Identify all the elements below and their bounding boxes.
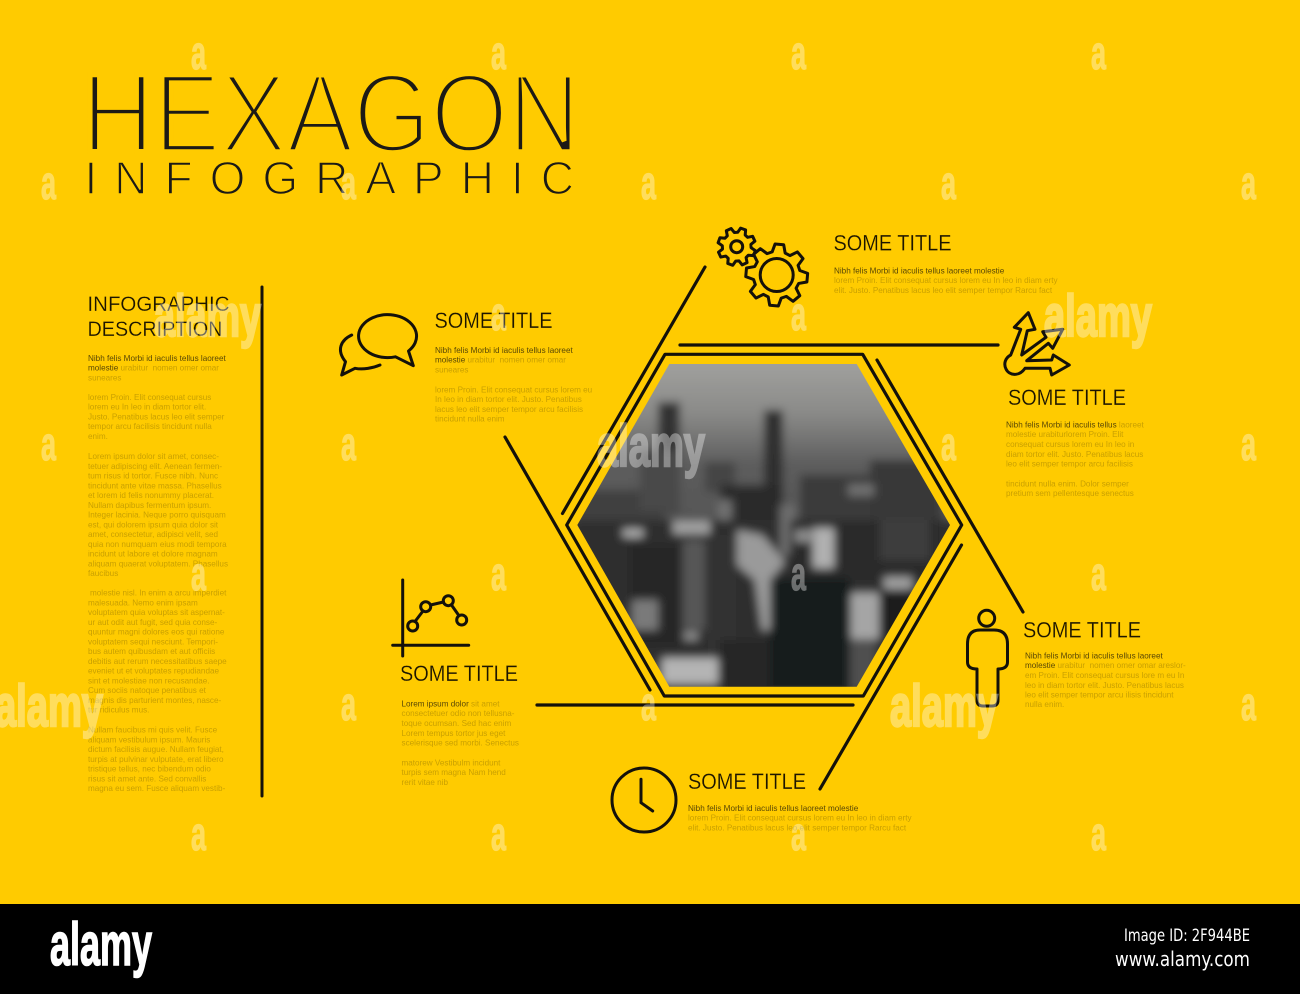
watermark: repeated letters: a (791, 547, 806, 600)
watermark: repeated letters: a (491, 807, 506, 860)
panel: directions (1005, 313, 1146, 498)
body text: diam tortor elit. Justo. Penatibus lacus (1006, 450, 1143, 459)
description body text: risus sit amet ante. Sed convallis (88, 774, 206, 783)
segment: bottom (537, 703, 853, 707)
watermark: repeated letters: a (341, 156, 356, 209)
body text: Nibh felis Morbi id iaculis tellus laoreet (1025, 652, 1163, 660)
body text: toque ocumsan. Sed hac enim (402, 719, 511, 728)
body text: elit. Justo. Penatibus lacus leo elit semper tempor Rarcu fact (834, 286, 1053, 295)
description body text: dictum facilisis augue. Nullam feugiat, (88, 745, 224, 754)
title: SOME TITLE (1023, 618, 1141, 642)
description body text: malesuada. Nemo enim ipsam (88, 598, 198, 607)
description body text: Integer lacinia. Neque porro quisquam (88, 510, 226, 520)
watermark: repeated letters: a (41, 156, 56, 209)
body text: lorem Proin. Elit consequat cursus lorem eu In leo in diam erty (834, 276, 1058, 285)
icon: gears (713, 223, 810, 308)
icon: line chart (393, 580, 469, 656)
body text: molestie urabiturlorem Proin. Elit (1006, 430, 1124, 439)
icon: person (968, 610, 1008, 706)
image id: Image ID: 2F944BE (1124, 926, 1250, 946)
panel: people (968, 610, 1188, 709)
hexagon outline (567, 354, 962, 696)
body text: Lorem ipsum dolor (402, 700, 469, 708)
watermark: repeated letters (41, 26, 1256, 860)
description body text: incidunt ut labore et dolore magnam (88, 550, 218, 558)
description body text: lorem eu In leo in diam tortor elit. (88, 403, 206, 412)
description body text: molestie (88, 364, 119, 373)
description body text: turpis at pulvinar vulputate, erat libero (88, 755, 224, 764)
title: SOME TITLE (400, 661, 518, 686)
title line: infographic: INFOGRAPHIC (84, 152, 591, 204)
segment: top left (562, 267, 705, 514)
body text: leo in diam tortor elit. Justo. Penatibus lacus (1025, 681, 1184, 690)
body text: Nibh felis Morbi id iaculis tellus laoreet (435, 346, 573, 355)
body text: In leo in diam tortor elit. Justo. Penatibus (435, 395, 582, 404)
segment: bottom right (820, 545, 962, 789)
body text: tincidunt nulla enim. Dolor semper (1006, 480, 1129, 488)
body text: suneares (435, 365, 468, 374)
body text: urabitur nomen omer omar (465, 356, 566, 365)
title (82, 51, 591, 204)
description body text: magnis dis parturient montes, nasce- (88, 696, 222, 705)
description body text: sint et molestiae non recusandae. (88, 676, 210, 685)
watermark: repeated logos: alamy (597, 414, 705, 479)
description body text: ur aut odit aut fugit, sed quia conse- (88, 618, 217, 627)
watermark: repeated logos (0, 284, 1152, 739)
watermark: repeated letters: a (491, 26, 506, 79)
description body text: Nullam dapibus fermentum ipsum. (88, 501, 211, 510)
footer logo: alamy (50, 911, 152, 978)
description body text: aliquam vestibulum ipsum. Mauris (88, 735, 210, 744)
description body text: molestie nisl. In enim a arcu imperdiet (90, 588, 227, 598)
watermark: repeated logos: alamy (154, 284, 261, 349)
description body text: Nibh felis Morbi id iaculis tellus laoreet (88, 354, 226, 363)
watermark: repeated letters: a (191, 807, 206, 860)
panel: time (612, 768, 914, 832)
central hexagon (505, 267, 1023, 789)
description body text: voluptatem quia voluptas sit aspernat- (88, 608, 225, 617)
panel: data (393, 580, 521, 787)
body text: molestie (1025, 661, 1056, 670)
description body text: est, qui dolorem ipsum quia dolor sit (88, 520, 219, 529)
description body text: magna eu sem. Fusce aliquam vestib- (88, 784, 226, 793)
body text: lorem Proin. Elit consequat cursus lorem eu In leo in diam erty (688, 814, 912, 823)
hexagon photo: blurred city skyline (577, 364, 950, 687)
website: www.alamy.com (1115, 947, 1250, 971)
description body text: tur ridiculus mus. (88, 706, 149, 714)
watermark: repeated letters: a (191, 547, 206, 600)
body text: nulla enim. (1025, 700, 1064, 709)
watermark: repeated letters: a (791, 26, 806, 79)
title: SOME TITLE (1008, 385, 1126, 410)
watermark: repeated letters: a (941, 156, 956, 209)
panel: communication (340, 308, 594, 424)
watermark: repeated letters: a (641, 677, 656, 730)
segment: bottom left (505, 437, 650, 690)
body text: urabitur nomen omer omar areslor- (1055, 661, 1186, 670)
body text: Nibh felis Morbi id iaculis tellus laoreet molestie (688, 804, 859, 813)
watermark: repeated letters: a (191, 26, 206, 79)
segment: top right (877, 360, 1023, 612)
watermark: repeated letters: a (641, 156, 656, 209)
title: SOME TITLE (834, 230, 952, 256)
description body text: amet, consectetur, adipisci velit, sed (88, 530, 218, 539)
watermark: repeated letters: a (941, 417, 956, 470)
icon: speech bubbles (340, 315, 417, 375)
watermark: repeated logos: alamy (890, 674, 998, 739)
icon: three arrows (1005, 313, 1069, 375)
body text: leo elit semper tempor arcu ilisis tincidunt (1025, 690, 1174, 700)
watermark: repeated letters: a (1091, 547, 1106, 600)
description body text: bus autem quibusdam et aut officiis (88, 647, 215, 656)
description body text: Nullam faucibus mi quis velit. Fusce (88, 726, 218, 734)
watermark: repeated letters: a (41, 417, 56, 470)
description body text: voluptatem sequi nesciunt. Tempori- (88, 637, 218, 646)
description body text: Justo. Penatibus lacus leo elit semper (88, 412, 225, 422)
description heading (88, 292, 230, 341)
description body text: quia non numquam eius modi tempora (88, 540, 227, 549)
body text: elit. Justo. Penatibus lacus leo elit semper tempor Rarcu fact (688, 824, 907, 832)
body text: rerit vitae nib (402, 778, 448, 787)
watermark: repeated letters: a (341, 417, 356, 470)
description body text: tincidunt ante vitae massa. Phasellus (88, 481, 222, 490)
description body text: tetuer adipiscing elit. Aenean fermen- (88, 462, 222, 471)
description body text: faucibus (88, 569, 118, 578)
body text: lacus leo elit semper tempor arcu facilisis (435, 405, 583, 414)
body text: consectetuer odio non tellusna- (402, 709, 515, 718)
body text: leo elit semper tempor arcu facilisis (1006, 460, 1133, 468)
description body text: et lorem id felis nonummy placerat. (88, 491, 214, 500)
watermark: repeated letters: a (341, 677, 356, 730)
body text: turpis sem magna Nam hend (402, 768, 506, 777)
panel: description column (88, 287, 262, 796)
description body text: Cum sociis natoque penatibus et (88, 686, 207, 695)
body text: lorem Proin. Elit consequat cursus lorem eu (435, 386, 592, 394)
body text: Nibh felis Morbi id iaculis tellus (1006, 420, 1117, 430)
description body text: quuntur magni dolores eos qui ratione (88, 628, 225, 636)
description divider line (260, 287, 264, 796)
description body text: enim. (88, 432, 108, 441)
watermark: repeated letters: a (1241, 156, 1256, 209)
description body text: lorem Proin. Elit consequat cursus (88, 393, 211, 402)
segment: top (680, 343, 998, 347)
description body text: tempor arcu facilisis tincidunt nulla (88, 422, 212, 431)
body text: consequat cursus lorem eu In leo in (1006, 440, 1134, 449)
description body text: aliquam quaerat voluptatem. Phasellus (88, 559, 228, 568)
watermark: repeated letters: a (1091, 807, 1106, 860)
body text: matorew Vestibulm incidunt (402, 758, 501, 768)
description body text: Lorem ipsum dolor sit amet, consec- (88, 452, 219, 461)
description body text: suneares (88, 373, 121, 382)
description heading: INFOGRAPHIC (88, 292, 230, 316)
body text: molestie (435, 356, 466, 365)
watermark: repeated logos: alamy (1044, 284, 1152, 349)
body text: laoreet (1117, 420, 1144, 430)
description body text: debitis aut rerum necessitatibus saepe (88, 657, 227, 666)
body text: pretium sem pellentesque senectus (1006, 489, 1134, 498)
description body text: eveniet ut et voluptates repudiandae (88, 666, 219, 676)
body text: Nibh felis Morbi id iaculis tellus laoreet molestie (834, 266, 1005, 276)
body text: tincidunt nulla enim (435, 415, 505, 424)
icon: clock (612, 768, 676, 832)
body text: Lorem tempus tortor jus eget (402, 729, 506, 738)
description body text: tristique tellus, nec bibendum odio (88, 764, 211, 774)
description body text: tum risus id tortor. Fusce nibh. Nunc (88, 472, 218, 480)
body text: scelerisque sed morbi. Senectus (402, 738, 519, 748)
description body text: urabitur nomen omer omar (118, 364, 219, 373)
body text: sit amet (469, 700, 500, 708)
watermark: repeated letters: a (1091, 26, 1106, 79)
title: SOME TITLE (688, 769, 806, 794)
watermark: repeated letters: a (491, 287, 506, 340)
watermark: repeated letters: a (1241, 677, 1256, 730)
description heading: DESCRIPTION (88, 317, 222, 341)
watermark: repeated letters: a (1241, 417, 1256, 470)
panel: settings (713, 223, 1060, 308)
title: SOME TITLE (434, 308, 552, 333)
watermark: repeated letters: a (791, 807, 806, 860)
footer bar (0, 904, 1300, 994)
watermark: repeated letters: a (491, 547, 506, 600)
body text: em Proin. Elit consequat cursus lore m eu In (1025, 671, 1184, 680)
title line: hexagon: HEXAGON (82, 51, 580, 176)
watermark: repeated letters: a (791, 287, 806, 340)
